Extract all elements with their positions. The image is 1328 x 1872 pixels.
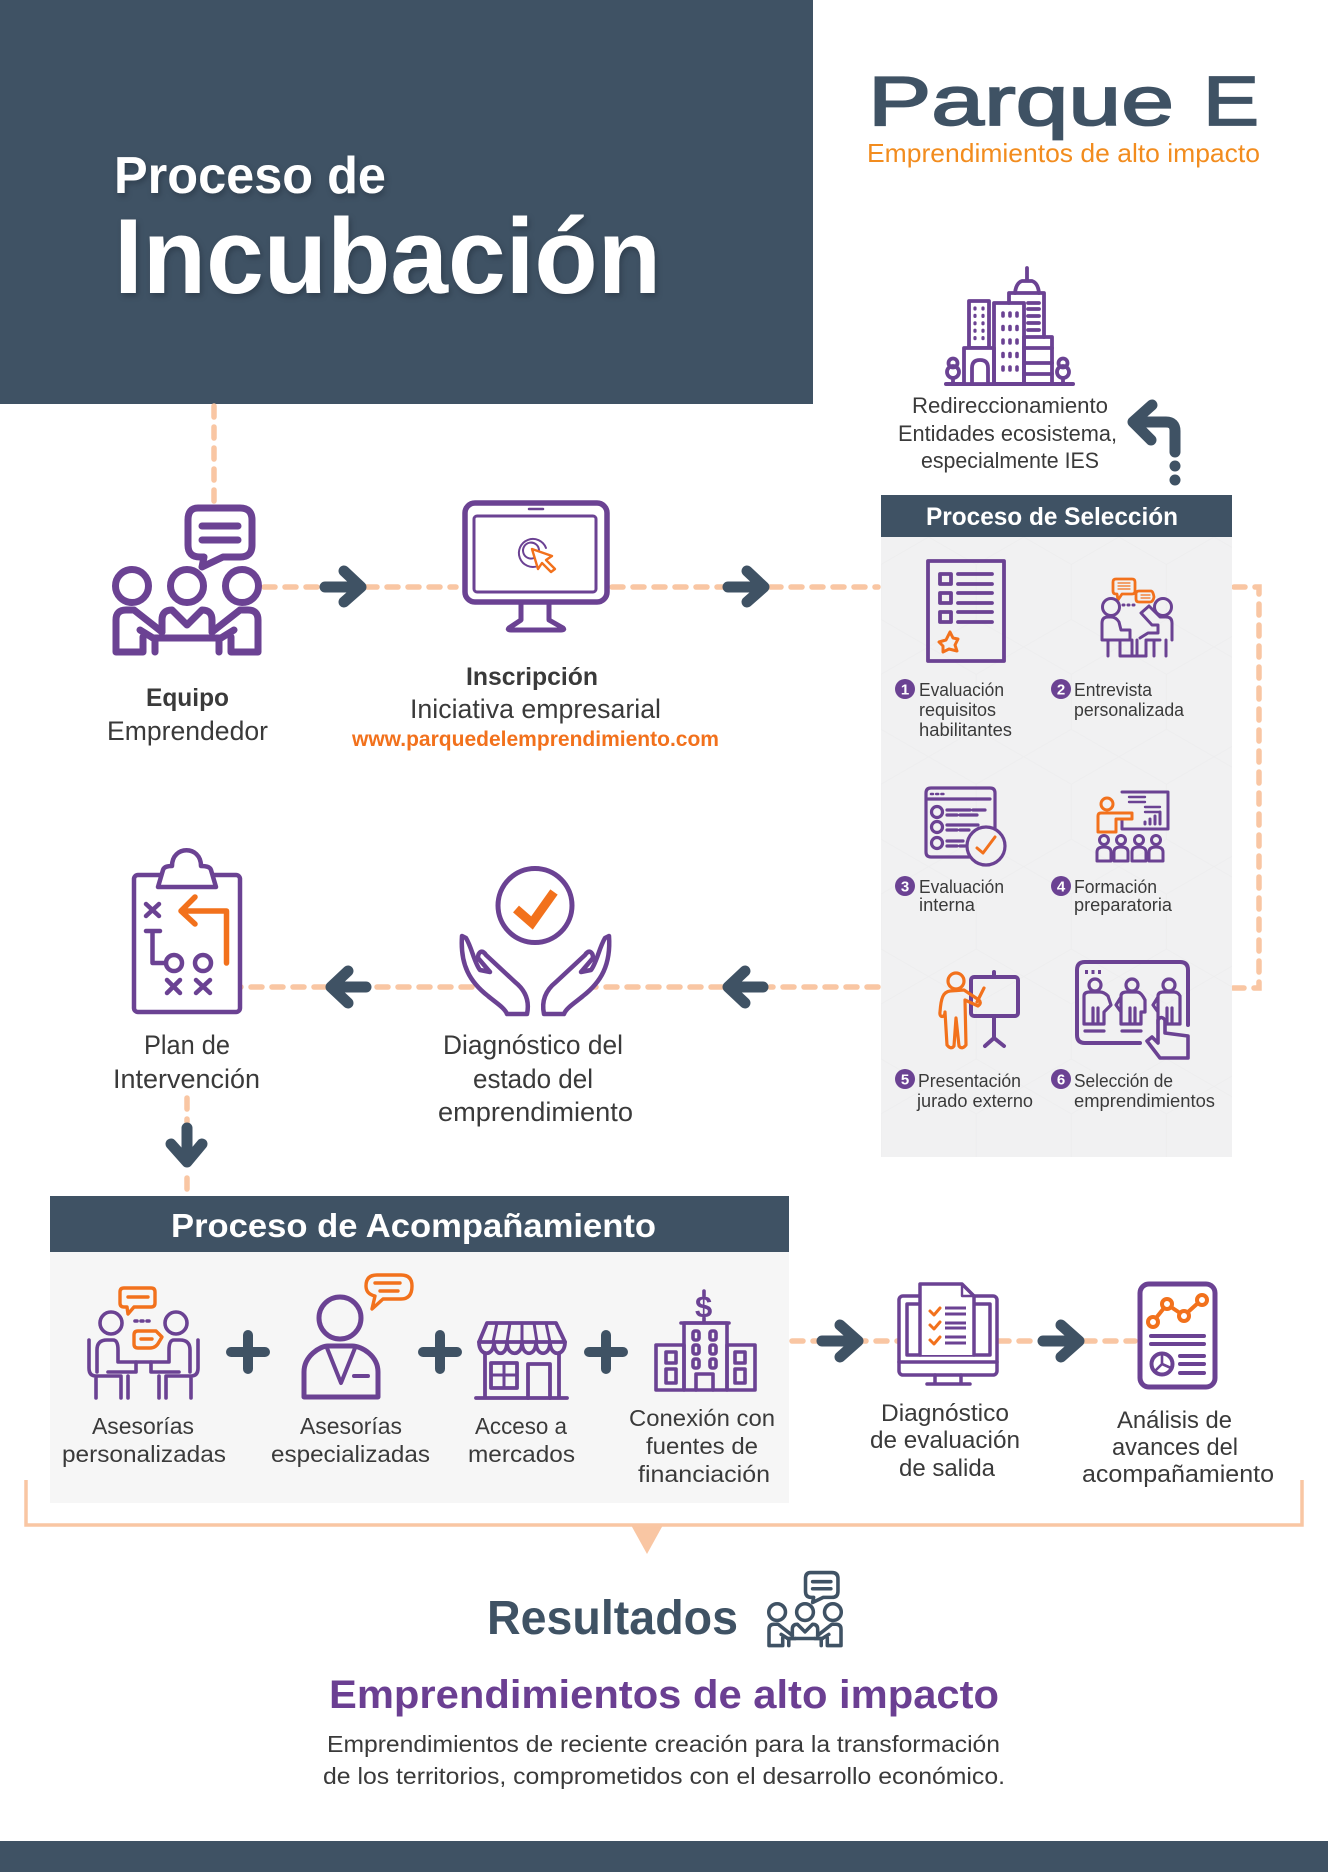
text: Diagnóstico del estado: estado del (473, 1064, 593, 1094)
label 1 (895, 679, 1012, 740)
icon: buildings (946, 268, 1073, 384)
label 1: requisitos (919, 700, 996, 720)
text: Diagnóstico del estado: Diagnóstico del (443, 1030, 623, 1060)
icon: selection of ventures (1077, 962, 1188, 1058)
label 3: interna (919, 895, 976, 915)
text: Diagnóstico de evaluación de salida: Diagnóstico (881, 1400, 1009, 1427)
icon: internal evaluation (926, 788, 1005, 865)
label 6: emprendimientos (1074, 1091, 1215, 1111)
logo: Parque E: E (1203, 62, 1259, 140)
text: Diagnóstico de evaluación de salida: de evaluación (870, 1427, 1020, 1454)
label 1: Evaluación (919, 680, 1004, 700)
text: Redireccionamiento: especialmente IES (921, 448, 1099, 473)
text: Asesorías personalizadas: personalizadas (62, 1441, 226, 1467)
icon: monitor with cursor (465, 503, 607, 630)
text: Conexión con fuentes de financiación: financiación (638, 1461, 770, 1487)
text: Análisis de avances: Análisis de (1117, 1407, 1232, 1434)
icon: financing bank: $ (695, 1289, 712, 1324)
icon: report with chart (1140, 1284, 1215, 1387)
label 4: Formación (1074, 877, 1157, 897)
text: results description: de los territorios, comprometidos con el desarrollo económico. (323, 1763, 1005, 1789)
label 5: Presentación (918, 1071, 1021, 1091)
heading: Proceso de Selección: Proceso de Selección (926, 503, 1178, 531)
icon: hands holding check (462, 868, 609, 1014)
text: Diagnóstico de evaluación de salida: de salida (899, 1455, 996, 1482)
icon: financing bank (656, 1289, 755, 1390)
text: Inscripción (351, 663, 719, 751)
text: Diagnóstico de evaluación de salida (870, 1400, 1020, 1482)
label 5: jurado externo (916, 1091, 1033, 1111)
text: Inscripción: Inscripción (466, 663, 598, 691)
icon: intervention plan clipboard (134, 850, 240, 1012)
label 3: 3 (901, 878, 909, 896)
arrow: team to inscription (325, 571, 361, 602)
logo: Parque E: Parque (868, 62, 1174, 140)
title: Proceso de (114, 147, 386, 205)
title (114, 147, 661, 316)
icon: market store (476, 1323, 567, 1398)
text: Acceso a mercados: Acceso a (475, 1413, 567, 1439)
dashed connectors, upper flow (187, 406, 1259, 1341)
text: Equipo Emprendedor: Emprendedor (107, 716, 268, 746)
label 6: 6 (1057, 1072, 1065, 1088)
label 6: Selección de (1074, 1071, 1173, 1091)
text: Análisis de avances: avances del (1112, 1434, 1238, 1461)
icon: presenter with board (940, 972, 1018, 1048)
title: Incubación (114, 196, 661, 316)
icon: specialised advisory (304, 1275, 412, 1397)
label 4 (1051, 876, 1173, 915)
text: Plan de Intervención: Intervención (113, 1064, 260, 1094)
label 2 (1051, 679, 1185, 720)
icon: requirements document (928, 561, 1004, 661)
text: Conexión con fuentes de financiación: Conexión con (629, 1405, 775, 1431)
arrow: plan to accompaniment (171, 1128, 202, 1162)
label 1: habilitantes (919, 720, 1012, 740)
text: results description: Emprendimientos de reciente creación para la transformación (327, 1731, 1000, 1757)
text: Asesorías especializadas: especializadas (271, 1441, 430, 1467)
plus 3 (589, 1335, 623, 1369)
text: Asesorías especializadas: Asesorías (300, 1413, 402, 1439)
text: results description (323, 1731, 1005, 1789)
arrow: exit evaluation to analysis (1043, 1325, 1079, 1357)
heading: Proceso de Acompañamiento: Proceso de Acompañamiento (171, 1207, 656, 1244)
text: Diagnóstico del estado (438, 1030, 633, 1127)
plus 1 (231, 1335, 265, 1369)
bracket with pointer (26, 1480, 1302, 1554)
label 5: 5 (901, 1072, 909, 1088)
text: Redireccionamiento (898, 393, 1117, 473)
arrow: inscription to selection (728, 571, 764, 602)
header banner (0, 0, 813, 404)
footer band (0, 1841, 1328, 1872)
label 6 (1051, 1069, 1215, 1111)
text: Conexión con fuentes de financiación: fuentes de (646, 1433, 758, 1459)
logo: Parque E (867, 62, 1260, 168)
plus 2 (423, 1335, 457, 1369)
label 4: 4 (1057, 878, 1066, 896)
arrow: selection to diagnosis (728, 971, 763, 1003)
label 2: personalizada (1074, 700, 1185, 720)
label 2: Entrevista (1074, 680, 1153, 700)
text: Análisis de avances (1082, 1407, 1274, 1488)
label 5 (895, 1069, 1033, 1111)
text: Equipo Emprendedor (107, 684, 268, 746)
text: Diagnóstico del estado: emprendimiento (438, 1097, 633, 1127)
text: Plan de Intervención: Plan de (144, 1030, 230, 1060)
text: Acceso a mercados: mercados (468, 1441, 575, 1467)
text: Redireccionamiento: Entidades ecosistema, (898, 421, 1117, 446)
arrow: redirect (1133, 405, 1180, 486)
label 2: 2 (1057, 682, 1065, 698)
text: Acceso a mercados (468, 1413, 575, 1467)
icon: entrepreneurial team (116, 508, 258, 652)
text: Plan de Intervención (113, 1030, 260, 1094)
text: Redireccionamiento: Redireccionamiento (912, 393, 1108, 418)
text: Conexión con fuentes de financiación (629, 1405, 775, 1487)
icon: results team (769, 1573, 841, 1646)
panel: Proceso de Acompañamiento (50, 1196, 789, 1503)
label 1: 1 (901, 682, 909, 698)
text: Análisis de avances: acompañamiento (1082, 1461, 1274, 1488)
logo: Parque E: Emprendimientos de alto impacto (867, 138, 1260, 168)
icon: personal advisory (89, 1288, 198, 1398)
heading: Proceso de Selección (881, 495, 1232, 537)
arrow: diagnosis to plan (331, 971, 366, 1003)
icon: preparatory training (1097, 792, 1168, 861)
label 4: preparatoria (1074, 895, 1173, 915)
subheading: Emprendimientos de alto impacto: Emprendimientos de alto impacto (329, 1673, 999, 1717)
label 3: Evaluación (919, 877, 1004, 897)
text: Asesorías especializadas (271, 1413, 430, 1467)
arrow: accompaniment to exit evaluation (822, 1325, 858, 1357)
heading: Resultados: Resultados (487, 1592, 738, 1645)
icon: personal interview (1102, 579, 1172, 656)
heading: Proceso de Acompañamiento (50, 1196, 789, 1252)
text: Asesorías personalizadas (62, 1413, 226, 1467)
text: Inscripción: Iniciativa empresarial (410, 694, 661, 724)
label 3 (895, 876, 1004, 915)
text: Inscripción: www.parquedelemprendimiento.com (351, 728, 719, 751)
panel: Proceso de Selección (881, 495, 1232, 1157)
text: Asesorías personalizadas: Asesorías (92, 1413, 194, 1439)
icon: exit evaluation monitor (899, 1284, 997, 1384)
text: Equipo Emprendedor: Equipo (146, 684, 229, 712)
